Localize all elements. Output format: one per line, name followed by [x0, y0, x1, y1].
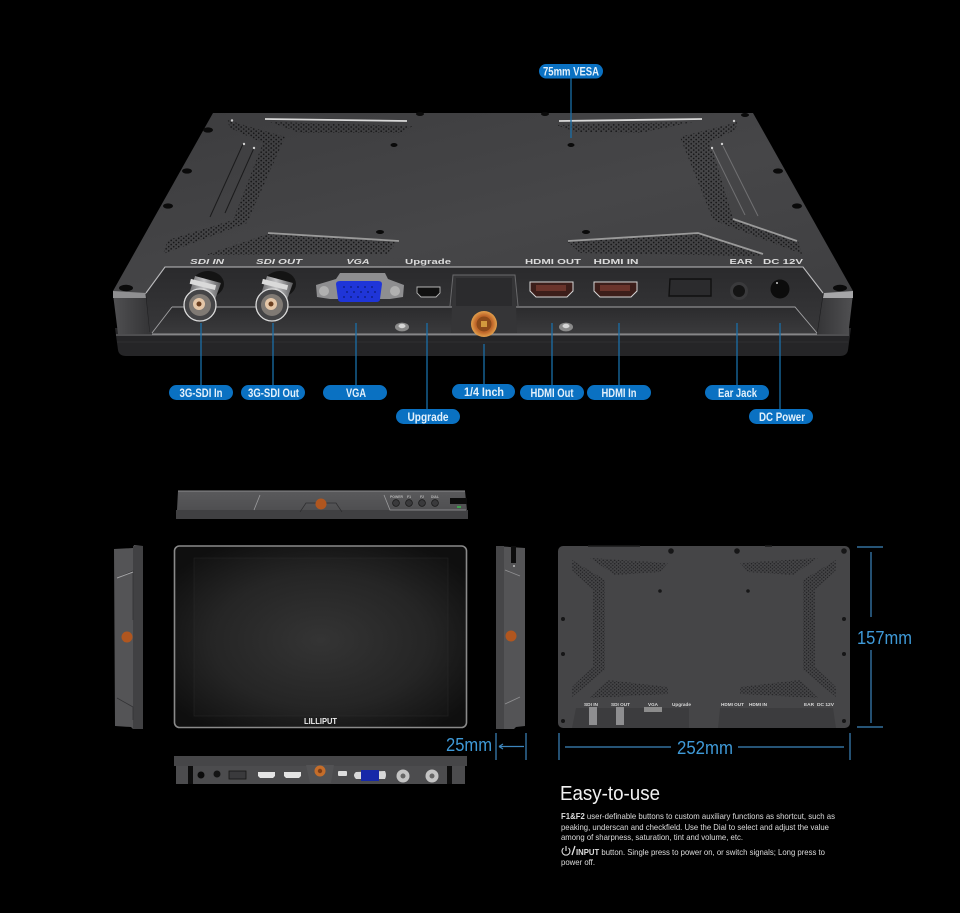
1/4 inch brass screw: [471, 311, 497, 337]
callout: Ear Jack: [705, 323, 769, 400]
port labels: DC 12V: [817, 702, 834, 707]
port labels: SDI IN: [584, 702, 598, 707]
orange screw: [506, 630, 516, 642]
text block: power and input button: [561, 846, 825, 867]
button labels: [390, 495, 440, 499]
text block: F1 and F2 description: [561, 811, 835, 842]
port labels: SDI OUT: [611, 702, 630, 707]
silkscreen port labels: Upgrade: [405, 257, 451, 266]
brand logo: LILLIPUT: [304, 717, 337, 726]
ports row: [198, 765, 438, 783]
callout: HDMI Out: HDMI Out: [530, 386, 574, 400]
port: mini USB upgrade: [417, 287, 440, 297]
mounting screw holes: [119, 112, 847, 291]
perforated vents: [163, 120, 802, 256]
dimension: 157mm height: [857, 547, 912, 727]
bottom lip: [115, 328, 851, 356]
connector thumbnails: [589, 707, 624, 725]
left side view: [114, 545, 143, 729]
callout: 3G-SDI Out: [241, 323, 305, 400]
silkscreen port labels: HDMI OUT: [525, 257, 582, 266]
silkscreen port labels: HDMI IN: [594, 257, 638, 266]
orange screw: [316, 498, 326, 510]
callout: DC Power: DC Power: [759, 410, 805, 424]
dimension: 25mm depth: [446, 733, 526, 760]
callout: 3G-SDI Out: 3G-SDI Out: [248, 386, 299, 400]
recess floor: [152, 307, 817, 333]
callout: VGA: [323, 323, 387, 400]
port: SDI IN BNC: [184, 271, 224, 321]
silkscreen port labels: SDI OUT: [256, 257, 304, 266]
silkscreen port labels: SDI IN: [190, 257, 225, 266]
dimension: 252mm width: [559, 733, 850, 760]
silkscreen port labels: VGA: [346, 257, 370, 266]
callout: HDMI Out: [520, 323, 584, 400]
text block: F1 and F2 description: peaking, underscan and checkfield. Use the Dial to select and adjust the value: [561, 822, 829, 832]
front view with screen: [174, 546, 466, 728]
dimension: 157mm height: 157mm: [857, 628, 912, 648]
button labels: F1: [407, 495, 411, 499]
callout: VGA: VGA: [346, 386, 366, 400]
tripod mount bump: [450, 275, 518, 337]
callout: Ear Jack: Ear Jack: [718, 386, 757, 400]
callout: 1/4 Inch: [452, 344, 515, 399]
silkscreen port labels: EAR: [730, 257, 753, 266]
knockout panel: [669, 279, 711, 296]
silkscreen port labels: DC 12V: [763, 257, 803, 266]
button labels: DIAL: [431, 495, 440, 499]
port labels: [584, 702, 834, 707]
port recess: [572, 708, 836, 728]
button labels: POWER: [390, 495, 403, 499]
back plate: [113, 113, 853, 298]
text block: power and input button: INPUT button. Single press to power on, or switch signals; Long press to: [576, 847, 825, 857]
control buttons: [393, 500, 438, 506]
left corner block: [113, 291, 152, 334]
callout: 3G-SDI In: [169, 323, 233, 400]
orange screw: [122, 632, 132, 642]
text block: power and input button: power off.: [561, 857, 595, 867]
port labels: VGA: [648, 702, 659, 707]
right side view: [496, 546, 525, 729]
port: ear jack: [730, 282, 748, 300]
callout: HDMI In: HDMI In: [602, 386, 636, 400]
display area: [194, 558, 448, 716]
button labels: F2: [420, 495, 424, 499]
icon: power symbol: [562, 846, 575, 855]
bright vent bars: [210, 119, 797, 254]
heading: Easy-to-use: Easy-to-use: [560, 783, 660, 805]
port: HDMI OUT: [530, 282, 573, 297]
top edge view: [176, 491, 468, 519]
text block: F1 and F2 description: F1&F2 user-definable buttons to custom auxiliary functions as shortcut, such as: [561, 811, 835, 821]
dimension: 25mm depth: 25mm: [446, 735, 492, 755]
callout: 75mm VESA: [539, 64, 603, 138]
callout: 1/4 Inch: 1/4 Inch: [464, 385, 504, 399]
callout: DC Power: [749, 323, 813, 424]
callout: 3G-SDI In: 3G-SDI In: [180, 386, 222, 400]
port labels: HDMI IN: [749, 702, 767, 707]
port: DC power: [770, 280, 790, 298]
screws: [561, 548, 847, 726]
bottom edge view with ports: [174, 756, 467, 784]
vents: [572, 558, 836, 698]
port labels: HDMI OUT: [721, 702, 744, 707]
text block: F1 and F2 description: among of sharpness, saturation, tint and volume, etc.: [561, 832, 743, 842]
right corner block: [815, 291, 853, 334]
vent slit end dots: [231, 119, 735, 149]
dial: [450, 498, 467, 504]
port labels: EAR: [804, 702, 815, 707]
callout: HDMI In: [587, 323, 651, 400]
power LED: [457, 506, 461, 508]
port: VGA: [316, 273, 404, 302]
monitor rear perspective view: [113, 112, 853, 356]
callout: 75mm VESA: 75mm VESA: [543, 64, 599, 78]
back view of monitor: [558, 546, 850, 728]
port labels: Upgrade: [672, 702, 692, 707]
callout: Upgrade: [396, 323, 460, 424]
port: SDI OUT BNC: [256, 271, 296, 321]
small silver screws: [395, 323, 573, 331]
silkscreen port labels: [190, 257, 803, 266]
dimension: 252mm width: 252mm: [677, 738, 733, 758]
callout: Upgrade: Upgrade: [408, 410, 449, 424]
port: HDMI IN: [594, 282, 637, 297]
recessed port wall: [146, 267, 823, 333]
